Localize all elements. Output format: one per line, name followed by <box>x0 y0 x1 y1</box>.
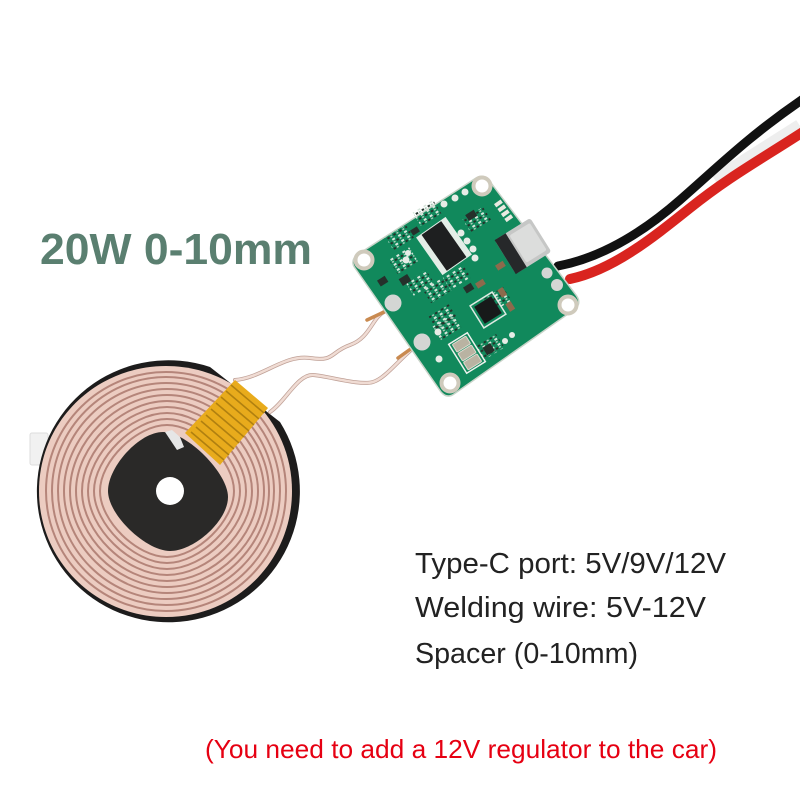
specifications text <box>415 548 727 670</box>
tab: white left edge <box>30 433 48 465</box>
capacitors group <box>449 333 485 373</box>
QFN chip <box>470 292 506 328</box>
title: 20W 0-10mm <box>40 225 312 274</box>
main SOP chip <box>416 217 472 275</box>
header pads <box>494 200 513 222</box>
wireless charging coil <box>30 312 417 622</box>
small components <box>377 210 495 355</box>
specifications text: Spacer (0-10mm) <box>415 638 638 670</box>
solder test dots <box>402 188 515 362</box>
USB Type-C port <box>495 218 551 274</box>
red regulator note: (You need to add a 12V regulator to the car) <box>205 734 717 764</box>
black ferrite backing <box>37 360 300 622</box>
green circuit board <box>353 176 579 396</box>
black core with center hole <box>108 432 228 551</box>
specifications text: Welding wire: 5V-12V <box>415 592 707 624</box>
yellow kapton tape <box>165 380 268 465</box>
brown passive parts <box>475 261 515 312</box>
specifications text: Type-C port: 5V/9V/12V <box>415 548 727 580</box>
power cable: black and red wires <box>558 97 800 279</box>
copper winding <box>39 366 292 617</box>
PCB wireless charging board <box>353 176 579 396</box>
solder pads for coil and power <box>384 268 563 350</box>
lead wires on coil <box>235 312 417 412</box>
component clusters <box>386 200 511 360</box>
mounting holes <box>356 178 576 392</box>
